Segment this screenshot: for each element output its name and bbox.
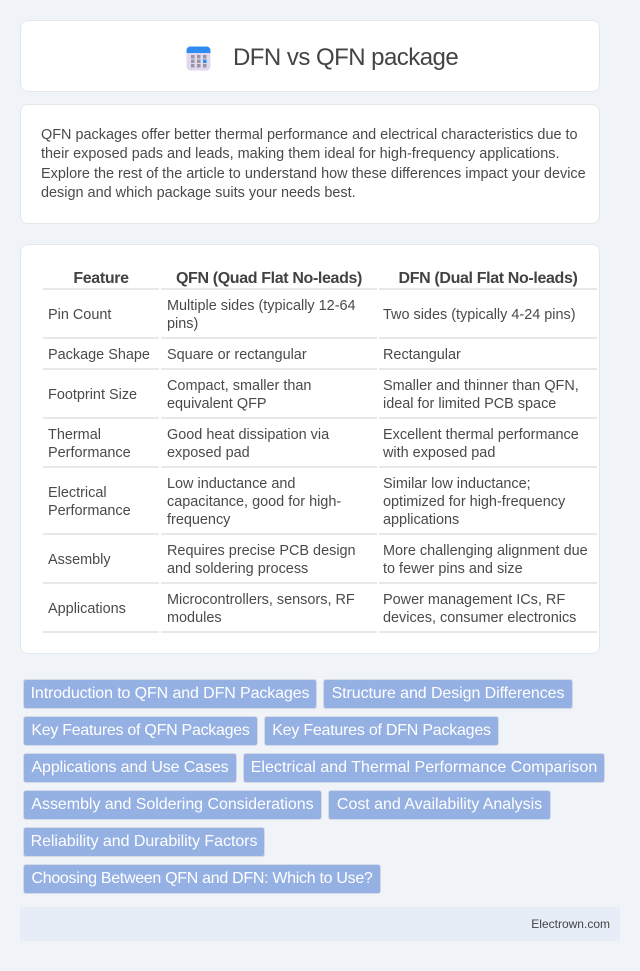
- tag: [23, 864, 381, 894]
- tag: Cost and Availability Analysis: [337, 796, 542, 813]
- row: electrical QFN: capacitance, good for high-: [167, 494, 341, 510]
- row: footprint DFN: [383, 378, 579, 412]
- table header: Feature: Feature: [73, 270, 129, 286]
- row: pin count feature: Pin Count: [48, 307, 111, 323]
- row: pin count DFN: Two sides (typically 4-24 pins): [383, 307, 576, 323]
- tag: Introduction to QFN and DFN Packages: [31, 685, 309, 702]
- row: assembly QFN: and soldering process: [167, 561, 308, 577]
- row: footprint QFN: [167, 378, 311, 412]
- row: thermal QFN: exposed pad: [167, 445, 250, 461]
- row: electrical feature: Electrical: [48, 485, 107, 501]
- tag: [23, 790, 322, 820]
- tag: [23, 827, 265, 857]
- table header: DFN: DFN (Dual Flat No-leads): [399, 270, 577, 286]
- row: applications feature: Applications: [48, 601, 126, 617]
- row: applications QFN: [167, 592, 355, 626]
- panel: comparison table: [20, 244, 600, 654]
- tag: Applications and Use Cases: [32, 759, 228, 776]
- intro text: QFN packages offer better thermal performance and electrical characteristics due to: [41, 126, 578, 142]
- topic tags: [23, 679, 605, 894]
- row: electrical DFN: Similar low inductance;: [383, 476, 531, 492]
- row: package shape feature: Package Shape: [48, 347, 150, 363]
- row: applications DFN: [383, 592, 576, 626]
- row: thermal DFN: [383, 427, 579, 461]
- row: thermal feature: Thermal: [48, 427, 101, 443]
- row: assembly QFN: [167, 543, 356, 577]
- row: assembly DFN: [383, 543, 588, 577]
- row: thermal feature: Performance: [48, 445, 131, 461]
- row: assembly feature: Assembly: [48, 552, 111, 568]
- table header: QFN: QFN (Quad Flat No-leads): [176, 270, 362, 286]
- row: electrical QFN: Low inductance and: [167, 476, 295, 492]
- tag: Key Features of DFN Packages: [272, 722, 491, 739]
- tag: [243, 753, 605, 783]
- row: package shape DFN: Rectangular: [383, 347, 461, 363]
- row: pin count QFN: Multiple sides (typically 12-64: [167, 298, 356, 314]
- row: pin count QFN: [167, 298, 356, 332]
- row: electrical DFN: [383, 476, 566, 528]
- row: electrical feature: Performance: [48, 503, 131, 519]
- row: applications DFN: devices, consumer electronics: [383, 610, 576, 626]
- footer credit: Electrown.com: [531, 917, 610, 931]
- tag: Key Features of QFN Packages: [31, 722, 250, 739]
- tag: [23, 679, 317, 709]
- row: package shape QFN: Square or rectangular: [167, 347, 307, 363]
- row: assembly DFN: More challenging alignment due: [383, 543, 588, 559]
- intro text: design and which package suits your needs best.: [41, 185, 356, 201]
- intro text: their exposed pads and leads, making them ideal for high-frequency applications.: [41, 146, 559, 162]
- tag: [328, 790, 551, 820]
- row: footprint QFN: equivalent QFP: [167, 396, 267, 412]
- tag: [264, 716, 499, 746]
- row: thermal DFN: Excellent thermal performance: [383, 427, 579, 443]
- tag: Structure and Design Differences: [332, 685, 564, 702]
- tag: Reliability and Durability Factors: [31, 833, 257, 850]
- row: thermal QFN: [167, 427, 330, 461]
- tag: [23, 753, 237, 783]
- panel: header: [20, 20, 600, 92]
- row: thermal DFN: with exposed pad: [383, 445, 495, 461]
- tag: [23, 716, 258, 746]
- row: footprint feature: Footprint Size: [48, 387, 137, 403]
- tag: Electrical and Thermal Performance Comparison: [251, 759, 597, 776]
- row: assembly DFN: to fewer pins and size: [383, 561, 523, 577]
- row: electrical feature: [48, 485, 131, 519]
- row: electrical DFN: applications: [383, 512, 459, 528]
- row: electrical QFN: [167, 476, 341, 528]
- row: pin count QFN: pins): [167, 316, 198, 332]
- icon: calendar: [186, 46, 210, 70]
- row: electrical DFN: optimized for high-frequency: [383, 494, 565, 510]
- row: electrical QFN: frequency: [167, 512, 230, 528]
- row: thermal QFN: Good heat dissipation via: [167, 427, 329, 443]
- row: assembly QFN: Requires precise PCB design: [167, 543, 356, 559]
- row: applications DFN: Power management ICs, RF: [383, 592, 565, 608]
- tag: Choosing Between QFN and DFN: Which to Use?: [31, 870, 373, 887]
- footer: [20, 907, 620, 941]
- tag: [323, 679, 573, 709]
- intro text: Explore the rest of the article to understand how these differences impact your device: [41, 166, 586, 182]
- intro text: [41, 126, 586, 201]
- row: applications QFN: Microcontrollers, sensors, RF: [167, 592, 355, 608]
- title: DFN vs QFN package: [233, 44, 458, 71]
- row: thermal feature: [48, 427, 131, 461]
- tag: Assembly and Soldering Considerations: [31, 796, 314, 813]
- row: footprint QFN: Compact, smaller than: [167, 378, 311, 394]
- row: applications QFN: modules: [167, 610, 222, 626]
- panel: introduction: [20, 104, 600, 224]
- row: footprint DFN: Smaller and thinner than QFN,: [383, 378, 579, 394]
- row: footprint DFN: ideal for limited PCB space: [383, 396, 556, 412]
